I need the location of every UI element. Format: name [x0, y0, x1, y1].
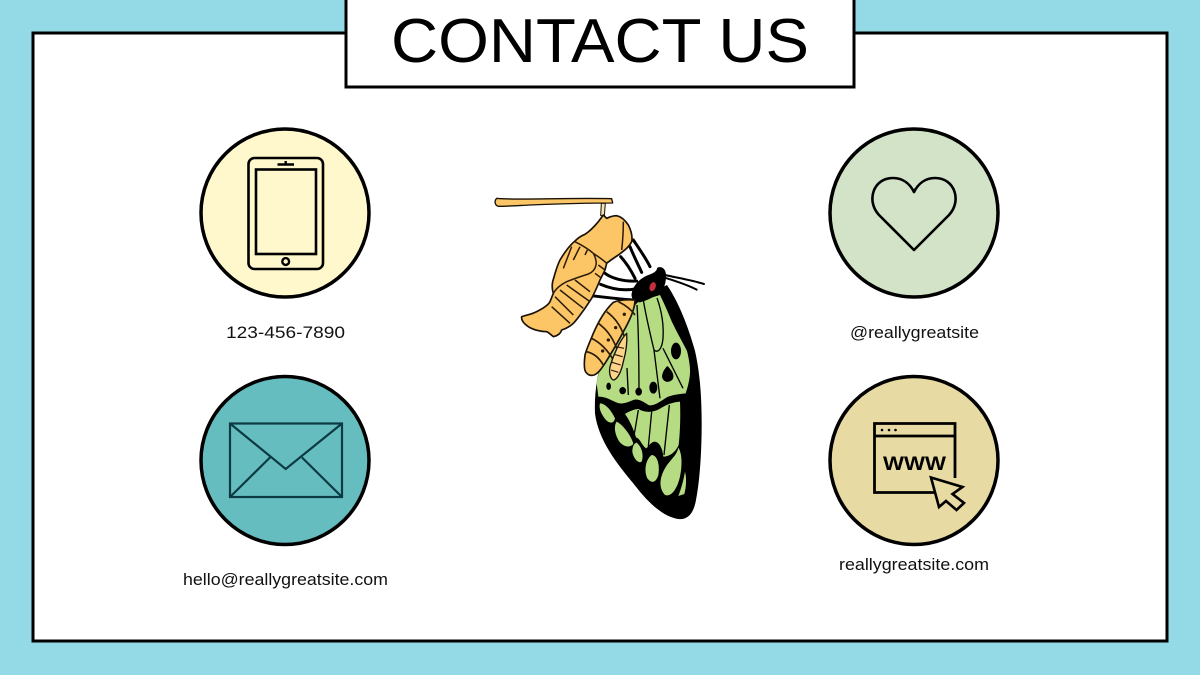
- chrysalis and stick: [495, 198, 650, 300]
- folded orange forewing: [584, 267, 704, 380]
- icon: heart: [830, 129, 998, 297]
- pupa shell: [522, 215, 632, 337]
- antennae: [665, 275, 704, 290]
- lower wing green cells: [600, 402, 686, 496]
- panel: social contact: [830, 129, 998, 342]
- upper wing green: [597, 295, 690, 405]
- icon: envelope: [201, 376, 369, 544]
- panel: website contact: [830, 376, 998, 574]
- wing veins: [627, 298, 683, 455]
- icon: browser window with cursor: [830, 376, 998, 544]
- panel: email contact: [183, 376, 388, 589]
- butterfly wing: [595, 285, 702, 519]
- email address: hello@reallygreatsite.com: [183, 570, 388, 589]
- legs: [586, 240, 650, 300]
- icon: tablet phone: [201, 129, 369, 297]
- icon: browser window with cursor: WWW: [883, 454, 946, 475]
- phone number: 123-456-7890: [226, 323, 345, 342]
- title: CONTACT US: [391, 7, 809, 76]
- stick: [495, 198, 613, 206]
- wing spots: [606, 343, 681, 396]
- panel: phone contact: [201, 129, 369, 342]
- social handle: @reallygreatsite: [850, 323, 979, 342]
- title: [346, 0, 854, 87]
- illustration: butterfly emerging from chrysalis: [495, 198, 704, 519]
- head: [632, 267, 666, 302]
- website address: reallygreatsite.com: [839, 555, 989, 574]
